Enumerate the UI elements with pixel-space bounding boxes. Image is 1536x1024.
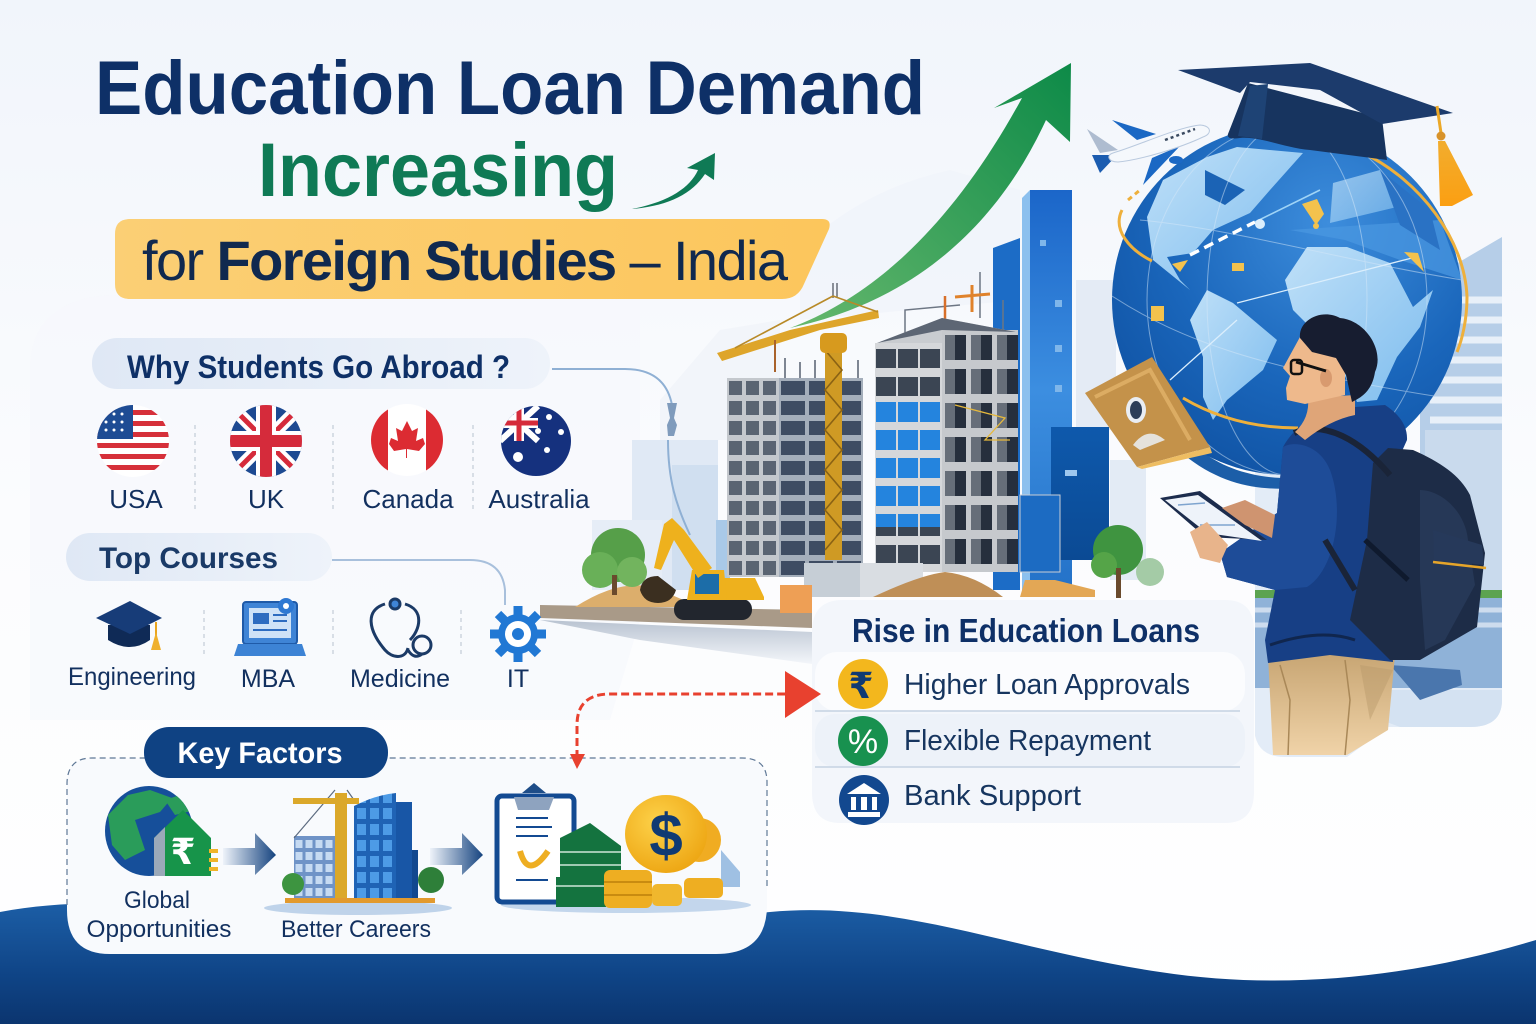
student backdrop city <box>1255 237 1502 760</box>
bottom wave <box>0 903 1536 1024</box>
icon: gear <box>490 606 546 662</box>
heading pill: key factors <box>144 727 388 778</box>
arrow <box>223 833 276 875</box>
building under construction left <box>727 358 863 577</box>
icon: floating document <box>1085 357 1212 469</box>
subtitle: increasing: Increasing <box>258 128 618 213</box>
student figure <box>1160 314 1486 755</box>
label: better careers: Better Careers <box>281 916 431 943</box>
orbit line <box>1119 153 1467 428</box>
flag: Australia <box>488 405 590 514</box>
heading: why students go abroad: Why Students Go Abroad ? <box>127 349 510 385</box>
panel: key factors: Opportunities <box>86 916 232 943</box>
row: higher loan approvals: ₹ <box>848 666 874 707</box>
course: Engineering: Engineering <box>68 663 196 691</box>
course: Engineering <box>68 601 196 691</box>
backpack <box>1350 448 1485 660</box>
row: flexible repayment: Flexible Repayment <box>904 725 1151 757</box>
icon: excavator <box>640 518 764 620</box>
tower crane <box>717 283 879 560</box>
icon: small green arrow <box>632 153 715 209</box>
title <box>95 46 925 213</box>
heading: top courses <box>66 533 332 581</box>
row: bank support <box>839 775 1081 825</box>
background skyline <box>30 170 1146 720</box>
icon: clipboard and coins: $ <box>649 802 683 869</box>
flag: UK <box>230 405 302 514</box>
row: higher loan approvals <box>815 652 1245 711</box>
continents <box>1147 147 1462 420</box>
icon: clipboard and coins <box>497 783 751 913</box>
icon: globe and rupee house <box>105 786 218 876</box>
title: Education Loan Demand <box>95 46 925 131</box>
heading: why students go abroad <box>92 338 550 389</box>
trees <box>582 525 1164 598</box>
building under construction centre <box>875 272 1018 572</box>
label: UK: UK <box>248 484 285 514</box>
row: bank support: Bank Support <box>904 780 1081 812</box>
row: higher loan approvals: Higher Loan Approvals <box>904 669 1190 701</box>
panel: rise in education loans <box>812 600 1254 825</box>
tablet <box>1160 491 1267 540</box>
big growth arrow <box>790 63 1071 328</box>
connector marker <box>667 403 677 436</box>
ground and road <box>540 563 1095 664</box>
globe with map <box>1112 125 1467 489</box>
lower rings <box>1188 450 1300 489</box>
icon: mini city <box>264 790 452 915</box>
heading: Rise in Education Loans <box>852 612 1200 649</box>
heading pill: key factors: Key Factors <box>178 737 342 770</box>
icon: globe and rupee house: ₹ <box>170 832 196 873</box>
course: IT <box>490 606 546 693</box>
neck and head <box>1295 395 1355 440</box>
shoulder strap <box>1294 429 1390 590</box>
label: Canada: Canada <box>362 484 454 514</box>
label: Australia: Australia <box>488 484 590 514</box>
course: MBA <box>234 598 306 693</box>
icon: graduation cap <box>1178 63 1473 206</box>
connector: why students <box>552 369 690 535</box>
trousers <box>1268 655 1395 755</box>
glasses <box>1296 362 1326 371</box>
panel: key factors <box>67 727 767 954</box>
tall glass towers <box>993 190 1072 590</box>
row: flexible repayment <box>815 714 1245 767</box>
flag: Canada <box>364 410 454 508</box>
connector: top courses <box>332 560 505 605</box>
hands <box>1190 522 1228 563</box>
course: IT: IT <box>507 665 529 693</box>
icon: mortarboard <box>96 601 162 650</box>
heading: top courses: Top Courses <box>99 542 278 575</box>
label: global opportunities: Global <box>124 887 190 914</box>
low dark blue tower <box>1020 427 1109 572</box>
banner: for foreign studies: for Foreign Studies – India <box>142 229 789 292</box>
icon: airplane <box>1087 120 1209 185</box>
flag: USA <box>97 405 169 514</box>
icon: stethoscope <box>371 599 431 656</box>
course: MBA: MBA <box>241 665 295 693</box>
course: Medicine <box>350 599 450 693</box>
hoodie <box>1220 405 1407 663</box>
row: flexible repayment: % <box>848 723 878 761</box>
course: Medicine: Medicine <box>350 665 450 693</box>
label: USA: USA <box>109 484 163 514</box>
city: buildings <box>717 190 1109 590</box>
icon: laptop <box>234 598 306 656</box>
red dashed arrow <box>570 671 821 769</box>
arrow <box>430 833 483 875</box>
